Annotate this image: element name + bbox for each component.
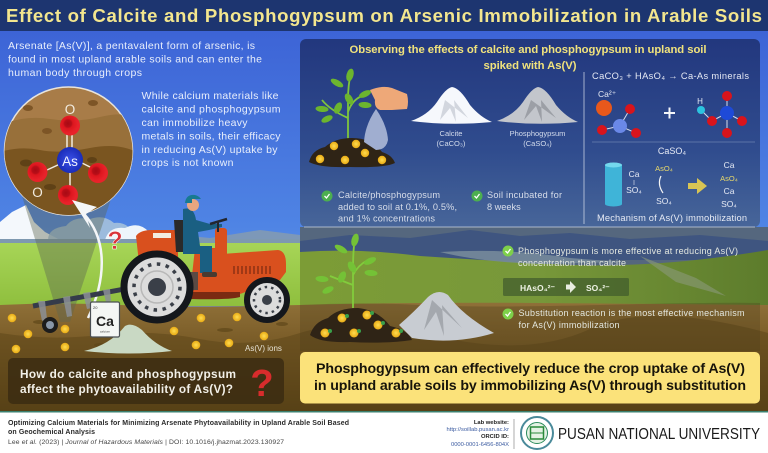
calcite pile: Calcite	[440, 129, 462, 138]
soil circle with arsenate molecule: O	[65, 102, 75, 117]
title bar	[0, 0, 768, 31]
arrow: from soil up to molecule	[72, 200, 102, 318]
lab and ORCID links	[446, 420, 509, 448]
background problem text: crops is not known	[142, 157, 234, 169]
conclusion box: in upland arable soils by immobilizing As(V) through substitution	[314, 378, 746, 394]
calcium pile and element card: calcium	[100, 330, 111, 334]
background problem text: metals in soils, their efficacy	[142, 130, 281, 142]
molecules: carbonate and arsenate: H	[697, 97, 703, 106]
intro text: found in most upland arable soils and can enter the	[8, 54, 262, 66]
dividers	[304, 72, 755, 227]
background problem text: While calcium materials like	[142, 90, 279, 102]
check: concentrations: and 1% concentrations	[338, 214, 435, 224]
plant with treated soil	[310, 233, 412, 343]
check: incubation: 8 weeks	[487, 202, 521, 212]
calcium pile and element card	[84, 302, 172, 354]
check: more effective: concentration than calcite	[518, 258, 626, 268]
footer	[0, 411, 768, 453]
university logo	[514, 417, 553, 449]
check: substitution	[502, 308, 744, 330]
lab and ORCID links: http://soillab.pusan.ac.kr	[446, 427, 509, 433]
plant with soil and hand	[309, 68, 408, 167]
check: concentrations: Calcite/phosphogypsum	[338, 190, 440, 200]
intro text	[8, 40, 262, 79]
mechanism diagram: AsO₄	[655, 164, 673, 173]
substitution box: HAsO₄²⁻	[520, 283, 555, 293]
lab and ORCID links: Lab website:	[474, 420, 509, 426]
question box	[8, 358, 284, 405]
panel heading	[350, 44, 706, 72]
mechanism diagram	[605, 146, 738, 209]
background problem text	[142, 90, 281, 169]
check: more effective	[502, 246, 738, 268]
tractor	[33, 195, 287, 333]
label: As(V) ions: As(V) ions	[245, 344, 282, 353]
phosphogypsum pile	[497, 87, 578, 148]
title bar: Effect of Calcite and Phosphogypsum on Arsenic Immobilization in Arable Soils	[6, 5, 762, 26]
substitution box: SO₄²⁻	[586, 283, 610, 293]
right panel upper	[300, 39, 760, 227]
check: incubation: Soil incubated for	[487, 190, 562, 200]
mechanism diagram: SO₄	[721, 199, 737, 209]
background problem text: in reducing As(V) uptake by	[142, 144, 278, 156]
check: concentrations	[322, 190, 457, 224]
calcium pile and element card: Ca	[96, 313, 114, 329]
calcium pile and element card: 20	[93, 305, 98, 310]
mechanism diagram: Ca	[724, 186, 735, 196]
calcite pile: (CaCO₃)	[437, 139, 466, 148]
reaction equation: CaCO₃ + HAsO₄ → Ca-As minerals	[592, 71, 749, 81]
mechanism diagram: CaSO₄	[658, 146, 686, 156]
calcite pile	[411, 87, 492, 148]
phosphogypsum pile in soil	[399, 292, 494, 341]
check: incubation	[472, 190, 562, 212]
lab and ORCID links: 0000-0001-6456-804X	[451, 442, 509, 448]
footer: Optimizing Calcium Materials for Minimizing Arsenate Phytoavailability in Upland Arable Soil Based	[8, 420, 349, 427]
mechanism diagram: Ca	[724, 160, 735, 170]
footer: on Geochemical Analysis	[8, 429, 95, 436]
soil circle with arsenate molecule: As	[62, 154, 78, 169]
question box: ?	[250, 363, 274, 405]
lab and ORCID links: ORCID ID:	[481, 434, 509, 440]
background problem text: can immobilize heavy	[142, 117, 248, 129]
magnifier cone	[22, 196, 112, 322]
question box: How do calcite and phosphogypsum	[20, 367, 236, 381]
mechanism diagram: AsO₄	[720, 174, 738, 183]
check: substitution: for As(V) immobilization	[518, 320, 620, 330]
conclusion box	[300, 352, 760, 404]
panel heading: Observing the effects of calcite and phosphogypsum in upland soil	[350, 44, 706, 56]
soil circle with arsenate molecule	[0, 87, 140, 215]
panel heading: spiked with As(V)	[484, 60, 577, 72]
substitution box	[503, 278, 629, 296]
intro text: human body through crops	[8, 67, 142, 79]
intro text: Arsenate [As(V)], a pentavalent form of arsenic, is	[8, 40, 255, 52]
conclusion box: Phosphogypsum can effectively reduce the crop uptake of As(V)	[316, 361, 745, 377]
check: more effective: Phosphogypsum is more effective at reducing As(V)	[518, 246, 738, 256]
check: concentrations: added to soil at 0.1%, 0.5%,	[338, 202, 457, 212]
footer: Lee et al. (2023) | Journal of Hazardous Materials | DOI: 10.1016/j.jhazmat.2023.130927	[8, 439, 284, 446]
background problem text: calcite and phosphogypsum	[142, 104, 281, 116]
molecules: carbonate and arsenate: Ca²⁺	[598, 89, 617, 99]
mechanism diagram: SO₄	[656, 196, 672, 206]
question box: affect the phytoavailability of As(V)?	[20, 382, 233, 396]
soil circle with arsenate molecule: O	[32, 185, 43, 200]
mechanism diagram: SO₄	[626, 185, 642, 195]
icon: question mark: ?	[107, 227, 123, 255]
mechanism caption: Mechanism of As(V) immobilization	[597, 213, 747, 223]
molecules: carbonate and arsenate	[596, 89, 747, 138]
phosphogypsum pile: Phosphogypsum	[510, 129, 565, 138]
mechanism diagram: Ca	[629, 169, 640, 179]
check: substitution: Substitution reaction is the most effective mechanism	[518, 308, 744, 318]
As(V) ions	[8, 313, 268, 353]
phosphogypsum pile: (CaSO₄)	[523, 139, 552, 148]
